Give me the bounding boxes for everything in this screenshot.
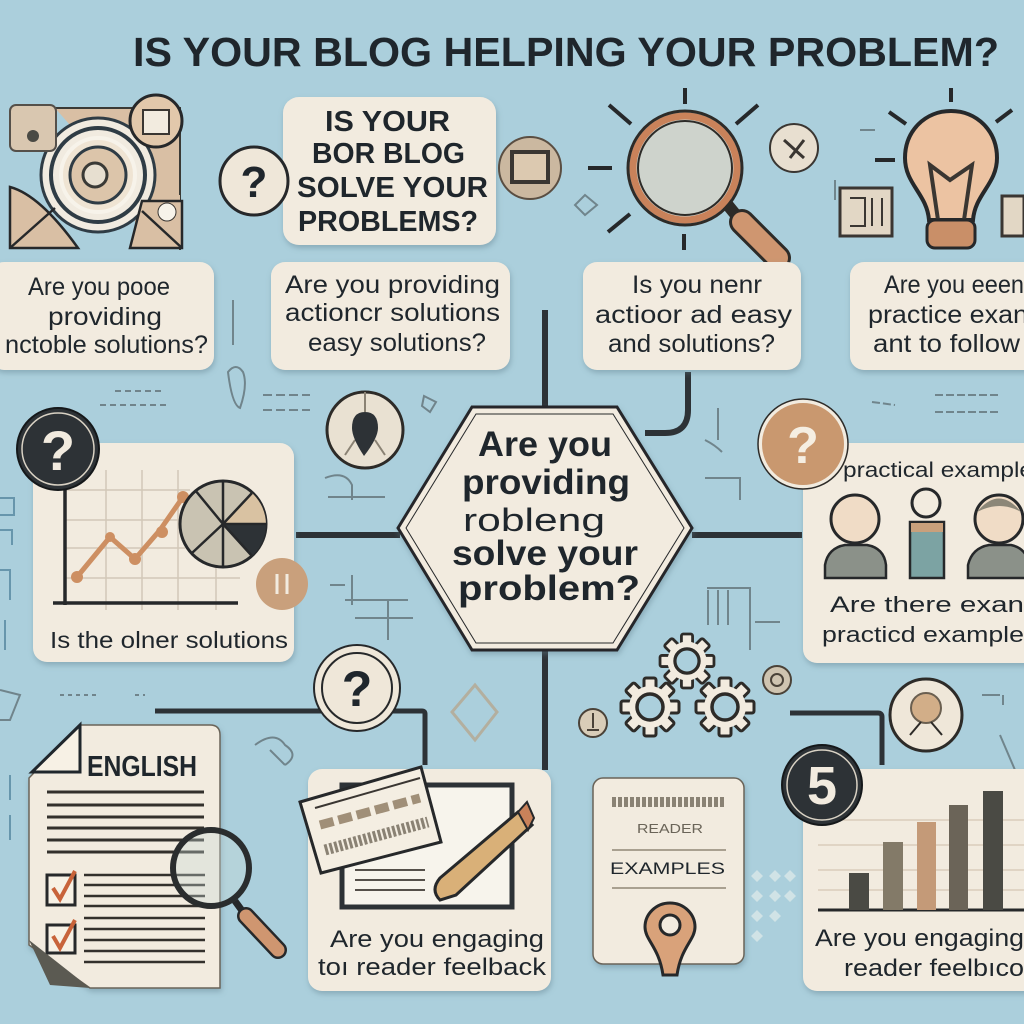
central hexagon: problem? xyxy=(458,569,640,608)
icon: question badge xyxy=(220,147,288,215)
central hexagon: providing xyxy=(462,463,630,502)
panel: practical examples: practicd example xyxy=(822,622,1024,647)
panel: practical examples xyxy=(803,443,1024,663)
icon: light bulb xyxy=(840,88,1024,248)
icon: question badge: ? xyxy=(241,158,267,207)
central hexagon xyxy=(398,407,692,650)
icon: question badge lower: ? xyxy=(342,661,372,717)
card: question row 2: actioncr solutions xyxy=(285,299,500,327)
icon: small gear box xyxy=(499,137,561,199)
panel: practical examples: practical example xyxy=(843,459,1024,482)
card: question row 1: Are you pooe xyxy=(28,273,170,301)
card: question row 3: and solutions? xyxy=(608,330,775,358)
icon: target and envelope xyxy=(10,95,182,250)
heading card xyxy=(283,97,496,245)
icon: gears xyxy=(621,634,754,736)
panel: card and pencil: Are you engaging xyxy=(330,926,544,953)
panel: examples document xyxy=(593,778,744,975)
central hexagon: Are you xyxy=(478,425,612,464)
card: question row 2: easy solutions? xyxy=(308,329,486,357)
icon: number five badge xyxy=(782,745,862,825)
heading card: SOLVE YOUR xyxy=(297,172,488,204)
panel: line and pie chart xyxy=(33,443,308,662)
icon: question badge dark xyxy=(17,408,99,490)
icon: question badge lower xyxy=(314,645,400,731)
diamond dots pattern xyxy=(751,870,796,942)
card: question row 1: nctoble solutions? xyxy=(5,331,208,359)
panel: bar chart: Are you engaging xyxy=(815,925,1024,952)
icon: question badge tan xyxy=(758,399,848,489)
panel: line and pie chart: Is the olner solutions xyxy=(50,627,288,653)
title: IS YOUR BLOG HELPING YOUR PROBLEM? xyxy=(133,29,999,75)
icon: number five badge: 5 xyxy=(807,756,837,816)
card: question row 1 xyxy=(0,262,214,370)
card: question row 4: practice exan xyxy=(868,301,1024,329)
panel: card and pencil: toı reader feelback xyxy=(318,954,547,981)
icon: question badge tan: ? xyxy=(787,417,819,475)
panel: bar chart xyxy=(803,769,1024,991)
icon: question badge dark: ? xyxy=(41,419,75,482)
panel: examples document: READER xyxy=(637,821,703,836)
central hexagon: robleng xyxy=(463,502,605,538)
panel: examples document: EXAMPLES xyxy=(610,859,725,878)
panel: English checklist document: ENGLISH xyxy=(87,751,197,783)
central hexagon: solve your xyxy=(452,534,638,573)
card: question row 4: ant to follow xyxy=(873,330,1021,358)
card: question row 4 xyxy=(850,262,1024,370)
card: question row 1: providing xyxy=(48,303,162,331)
heading card: IS YOUR xyxy=(325,106,450,138)
heading card: PROBLEMS? xyxy=(298,206,478,238)
panel: practical examples: Are there exan xyxy=(830,592,1024,617)
icon: person badge xyxy=(890,679,962,751)
card: question row 2: Are you providing xyxy=(285,271,500,299)
card: question row 3 xyxy=(583,262,801,370)
icon: magnifying glass with rays xyxy=(588,88,818,258)
panel: card and pencil xyxy=(300,767,551,991)
card: question row 3: Is you nenr xyxy=(632,271,762,299)
card: question row 2 xyxy=(271,262,510,370)
heading card: BOR BLOG xyxy=(312,138,465,170)
panel: English checklist document xyxy=(29,725,278,988)
faded background marks xyxy=(0,130,1015,840)
connector lines xyxy=(155,310,882,770)
icon: location badge xyxy=(327,392,403,468)
panel: bar chart: reader feelbıco xyxy=(844,955,1024,982)
card: question row 3: actioor ad easy xyxy=(595,301,793,329)
icon: small coin badges xyxy=(579,666,791,737)
